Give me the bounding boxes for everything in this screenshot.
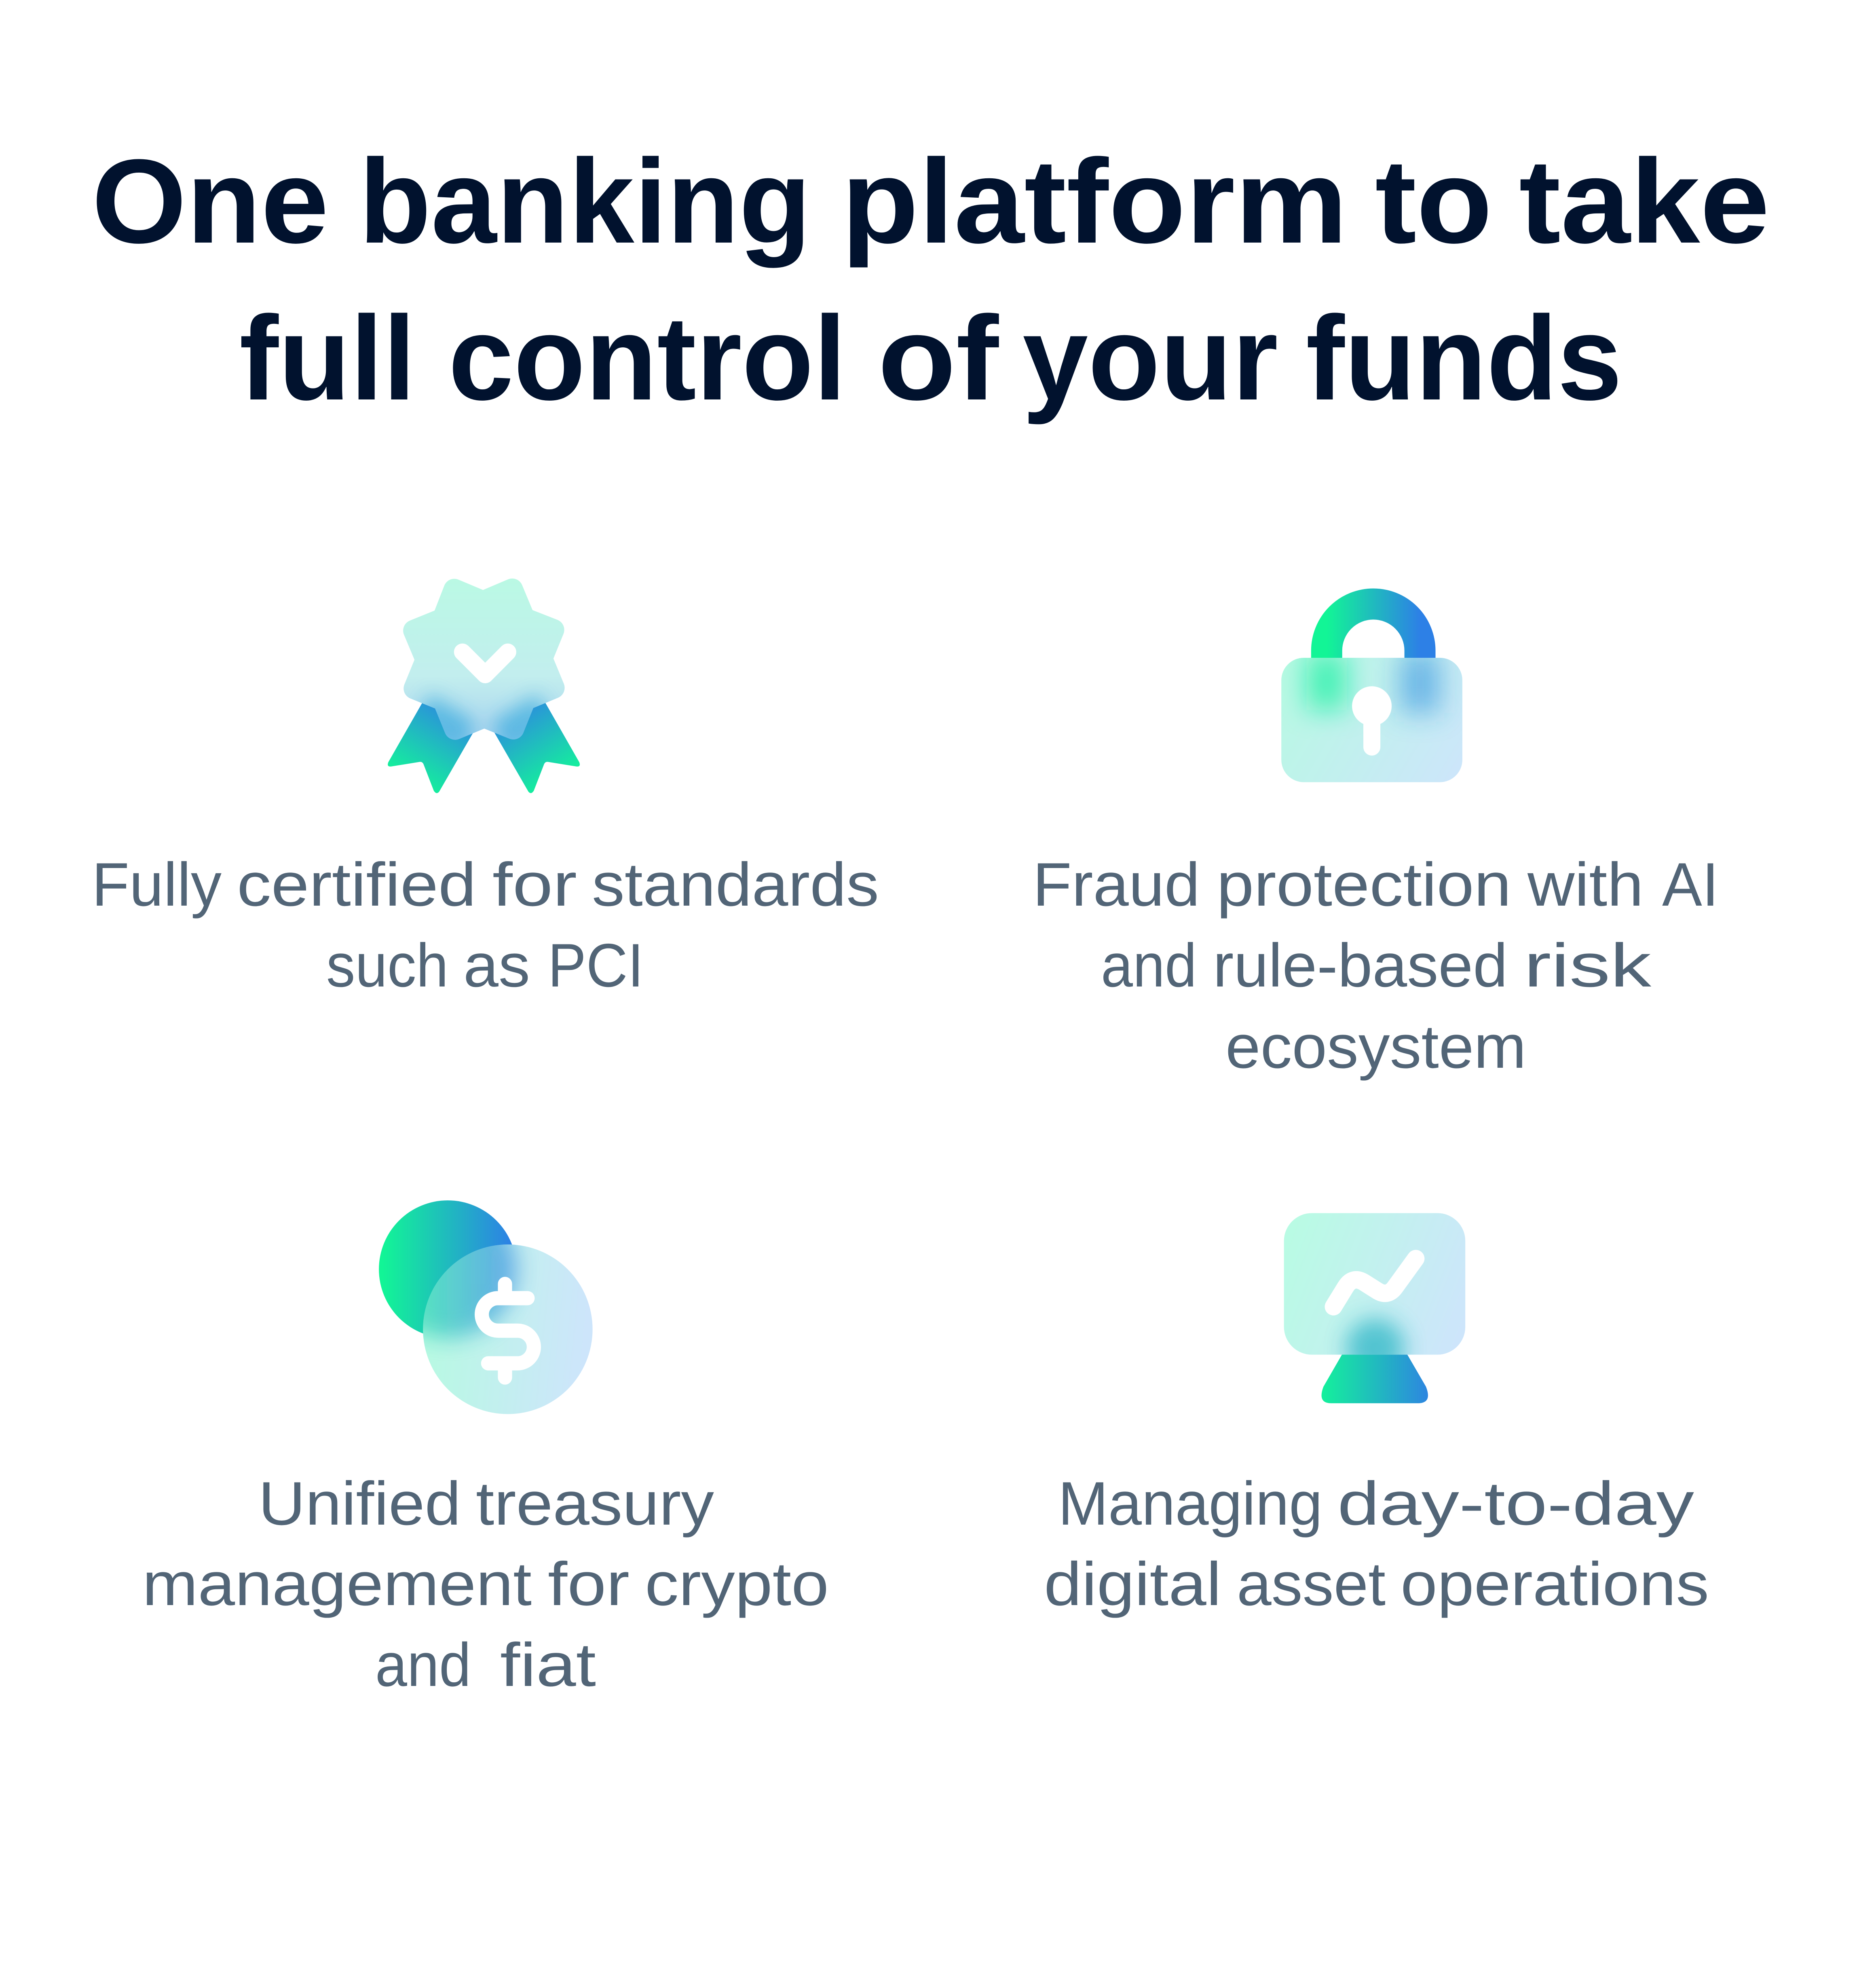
text: fraud protection: ecosystem (1225, 1012, 1526, 1081)
text: certified standards: PCI (548, 931, 644, 1000)
panel: unified treasury (142, 1200, 829, 1699)
text: certified standards: certified (237, 850, 476, 919)
title: take (1519, 134, 1770, 268)
text: fraud protection: Fraud (1033, 850, 1200, 919)
panel: digital asset operations (1044, 1213, 1709, 1618)
title: platform (841, 134, 1348, 269)
icon: overlapping coins with dollar sign (379, 1200, 593, 1414)
title (92, 134, 1770, 426)
text: fraud protection: AI (1662, 850, 1719, 919)
panel: certified standards (92, 579, 879, 1000)
panel: fraud protection (1033, 604, 1719, 1081)
text: certified standards: standards (592, 850, 879, 919)
title: banking (359, 134, 811, 269)
text: fraud protection (1033, 850, 1719, 1081)
text: fraud protection: risk (1524, 931, 1652, 1000)
title: control (448, 291, 846, 425)
text: unified treasury: fiat (500, 1631, 596, 1699)
text: digital asset operations (1044, 1469, 1709, 1618)
text: unified treasury: for (548, 1550, 630, 1618)
text: certified standards: for (492, 850, 577, 919)
text: unified treasury: management (142, 1550, 532, 1618)
text: digital asset operations: day-to-day (1337, 1469, 1694, 1538)
icon: monitor with trend line (1284, 1213, 1465, 1403)
text: certified standards: such (326, 931, 448, 1000)
text: digital asset operations: Managing (1058, 1469, 1322, 1538)
text: unified treasury (142, 1469, 829, 1699)
text: certified standards: as (463, 931, 530, 1000)
text: fraud protection: protection (1217, 850, 1511, 919)
title: of (878, 291, 1000, 425)
text: digital asset operations: digital (1044, 1550, 1221, 1618)
text: digital asset operations: asset (1237, 1550, 1386, 1618)
icon: padlock (1281, 604, 1462, 782)
title: funds (1306, 291, 1622, 425)
text: fraud protection: with (1527, 850, 1644, 919)
title: to (1375, 134, 1492, 268)
text: unified treasury: Unified (258, 1469, 461, 1538)
text: fraud protection: rule-based (1213, 931, 1508, 1000)
text: certified standards: Fully (92, 850, 222, 919)
text: unified treasury: crypto (645, 1550, 829, 1618)
text: certified standards (92, 850, 879, 1000)
title: One (92, 134, 329, 268)
text: fraud protection: and (1101, 931, 1197, 1000)
text: unified treasury: and (375, 1631, 471, 1699)
text: unified treasury: treasury (476, 1469, 714, 1538)
text: digital asset operations: operations (1401, 1550, 1709, 1618)
title: your (1023, 291, 1278, 426)
title: full (239, 291, 416, 425)
icon: award badge with check (388, 579, 580, 793)
